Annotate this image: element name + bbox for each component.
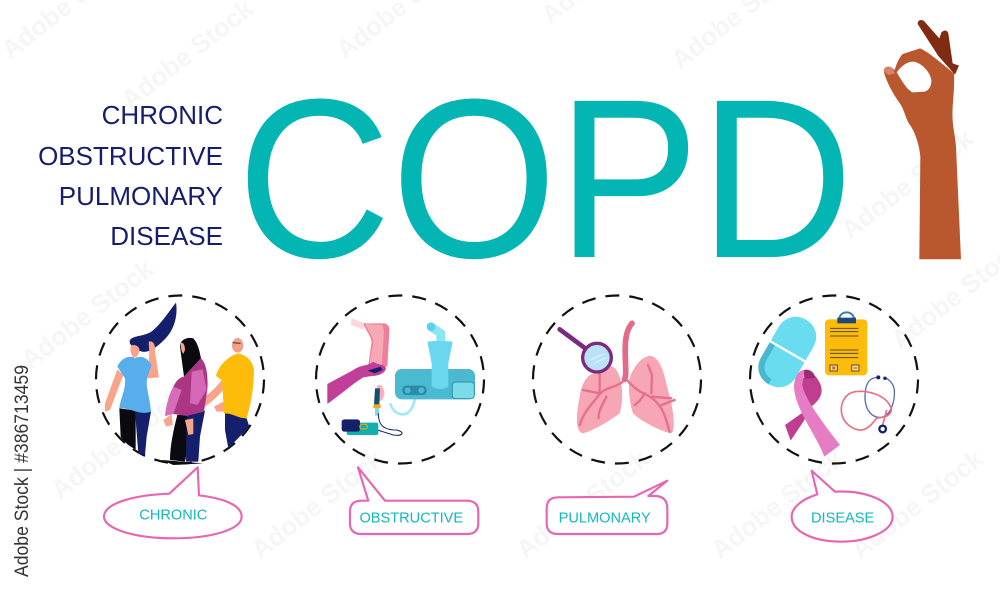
callout: obstructive: OBSTRUCTIVE [359,511,463,527]
panel: obstructive [316,296,484,464]
subtitle: acronym expansion: PULMONARY [59,181,223,211]
dashed circle: disease [750,296,918,464]
callout: chronic: CHRONIC [139,507,207,523]
faint stock watermark: Adobe Stock [510,443,654,565]
callout: pulmonary: PULMONARY [559,511,651,527]
subtitle: acronym expansion: OBSTRUCTIVE [38,141,223,171]
subtitle: acronym expansion [38,100,223,251]
callout: disease [792,471,893,542]
faint stock watermark: Adobe Stock [245,443,389,565]
icon: three people [105,303,254,465]
subtitle: acronym expansion: CHRONIC [102,100,223,130]
icon: lungs with magnifier [560,323,675,433]
callout: pulmonary [547,481,667,534]
panel: disease [750,296,918,464]
callout: obstructive [350,467,478,534]
panel: pulmonary [533,296,701,464]
faint stock watermark: Adobe Stock [45,383,189,505]
dashed circle: chronic [96,296,264,464]
stock id text: Adobe Stock | #386713459 [12,365,33,577]
dashed circle: pulmonary [533,296,701,464]
dashed circle: obstructive [316,296,484,464]
faint stock watermark: Adobe Stock [15,253,159,375]
subtitle: acronym expansion: DISEASE [110,221,223,251]
callout: disease: DISEASE [811,511,875,527]
callout: chronic [104,467,242,538]
faint stock watermark: Adobe Stock [835,123,979,245]
panel: chronic [96,296,264,465]
icon: OK hand [884,20,961,259]
faint stock watermark: Adobe Stock [705,443,849,565]
title COPD: COPD [237,52,853,305]
faint stock watermark: Adobe Stock [845,443,989,565]
icon: inhaler and nebulizer [327,318,475,435]
icon: medical items [751,310,894,457]
